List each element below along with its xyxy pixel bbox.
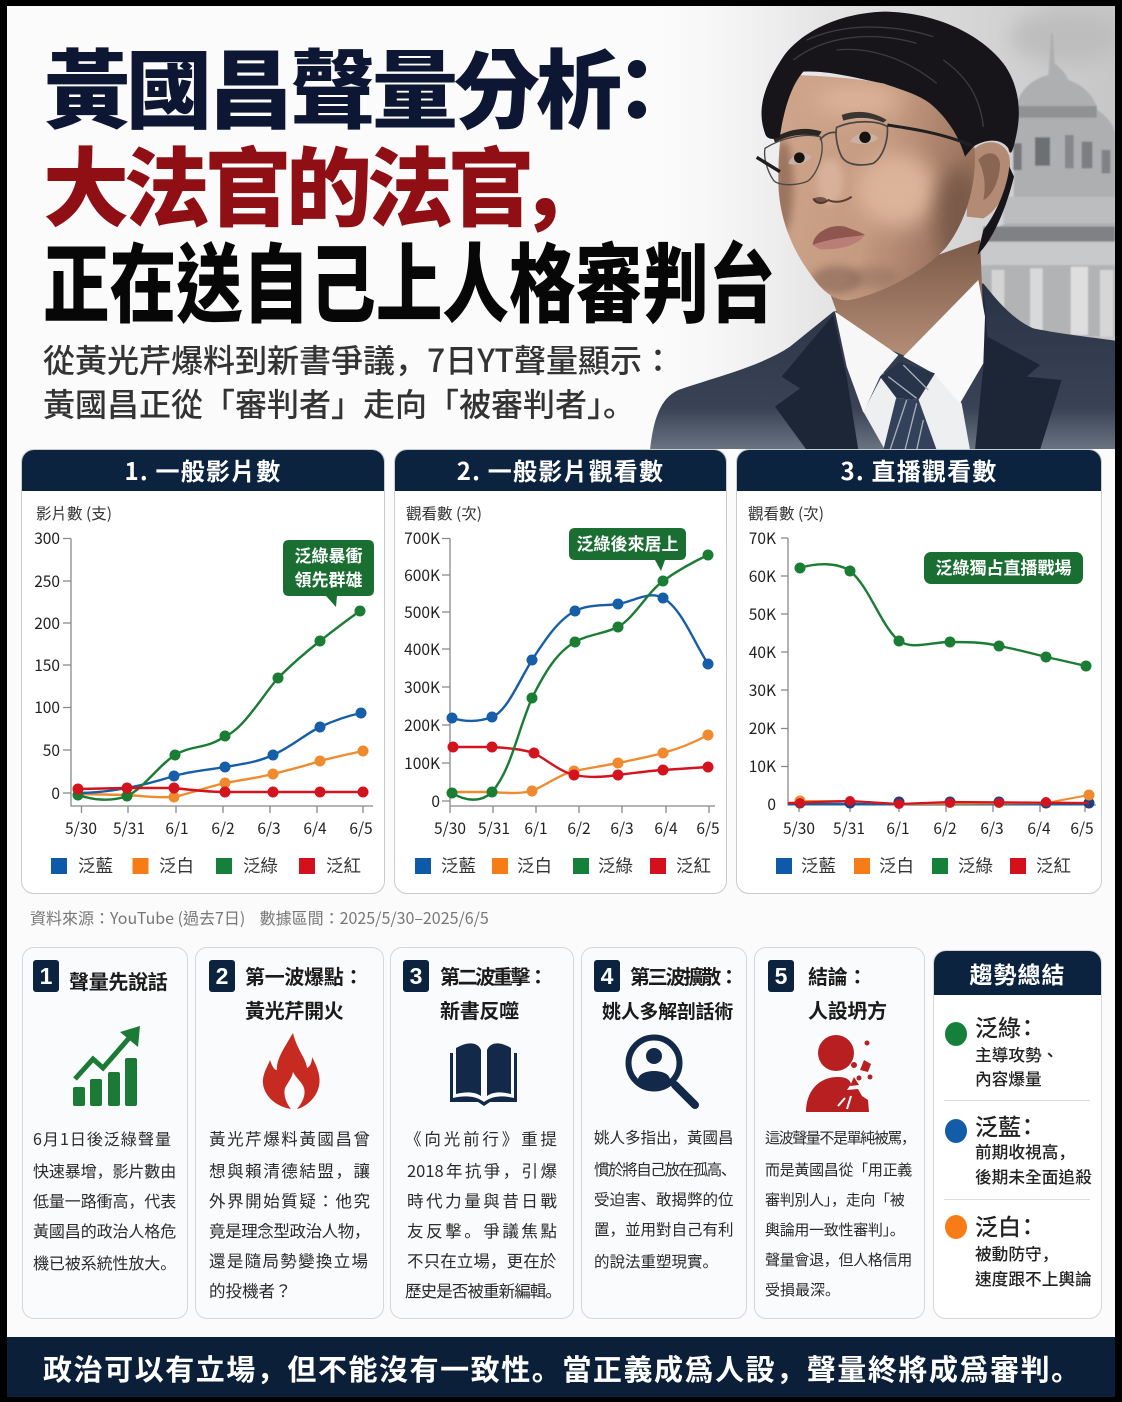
eyeglasses [757,122,972,185]
line chart: 觀看數: 600K [404,564,440,586]
legend [51,853,361,878]
card 2 body text: 外界開始質疑：他究 [209,1188,370,1212]
callout: 泛綠暴衝: 領先群雄 [294,566,362,591]
card 3 badge: 3 [410,963,422,989]
card 2 heading: 第一波爆點： [245,961,363,990]
card 4 body text: 姚人多指出，黃國昌 [594,1126,734,1148]
series: 泛藍 [78,708,366,793]
line chart: 直播觀看數: 6/5 [1070,817,1094,839]
line chart: 影片數: 5/31 [113,817,145,839]
line chart: 直播觀看數: 30K [749,679,776,701]
legend: 泛紅 [1036,853,1071,878]
legend: 泛綠 [598,853,633,878]
series: 泛白 [794,790,1094,806]
card 5: 結論 [754,947,925,1319]
card 5 body text: 聲量會退，但人格信用 [765,1249,912,1270]
subtitle [43,336,674,426]
card 5 heading: 人設坍方 [808,995,887,1024]
line chart: 影片數: 100 [34,696,60,718]
ear [967,142,1010,218]
line chart: 觀看數: 觀看數 (次) [406,502,482,524]
summary item: 泛白: 泛白： [975,1208,1039,1242]
line chart: 影片數: 6/4 [303,817,327,839]
card 5 heading: 結論： [808,961,867,990]
legend: 泛藍 [441,853,476,878]
line chart: 直播觀看數: 60K [749,565,776,587]
line chart: 影片數: 5/30 [65,817,97,839]
icon: flame [262,1033,320,1109]
icon: magnifier with person [626,1034,699,1109]
panel heading: 1. 一般影片數 [124,452,282,486]
card 2 body text: 黃光芹爆料黃國昌曾 [209,1126,370,1150]
summary item: 泛藍: 後期未全面追殺 [975,1164,1092,1188]
legend: 泛白 [879,853,914,878]
callout: 泛綠後來居上: 泛綠後來居上 [576,530,678,555]
panel heading: 3. 直播觀看數 [840,452,998,486]
line chart: 觀看數: 500K [404,601,440,623]
card 4 body text: 置，並用對自己有利 [594,1218,734,1240]
series: 泛藍 [788,796,1094,808]
icon: open book [450,1043,517,1106]
mouth [813,226,865,245]
title: line 3: 正在送自己上人格審判台 [43,215,775,340]
card 5 body text: 而是黃國昌從「用正義 [765,1159,912,1180]
summary item: 泛綠: 內容爆量 [975,1066,1042,1090]
summary heading [932,950,1102,994]
line chart: 觀看數: 6/5 [696,817,720,839]
card 4 heading [602,961,737,1024]
panel: 一般影片觀看數 [394,449,727,894]
line chart: 影片數 [34,502,374,878]
line chart: 直播觀看數: 6/3 [980,817,1004,839]
series: 泛紅 [448,742,714,780]
title: line 1: 黃國昌聲量分析： [44,21,676,146]
card 3 body text [405,1126,561,1302]
line chart: 直播觀看數: 50K [749,603,776,625]
series: 泛綠 [794,562,1092,672]
line chart: 直播觀看數: 觀看數 (次) [748,502,824,524]
line chart: 影片數: 150 [34,654,60,676]
summary item: 泛藍 [945,1108,1092,1188]
panel: 趨勢總結 [933,950,1102,1319]
panel heading [20,448,386,490]
summary item: 泛白: 被動防守， [975,1241,1058,1265]
building [977,33,1115,337]
summary item: 泛白: 速度跟不上輿論 [975,1266,1092,1290]
card 4 body text: 的說法重塑現實。 [594,1250,718,1272]
line chart: 影片數: 6/1 [165,817,189,839]
data source note: 資料來源：YouTube (過去7日) 數據區間：2025/5/30–2025/6/5 [30,905,489,929]
card 1 body text: 6月1日後泛綠聲量 [33,1126,171,1150]
legend: 泛白 [517,853,552,878]
legend: 泛綠 [958,853,993,878]
card 3: 第二波重擊 [390,947,574,1319]
card 2 body text [209,1126,370,1302]
card 1 body text: 快速暴增，影片數由 [33,1158,176,1182]
bottom banner [7,1337,1115,1397]
callout: 泛綠暴衝: 泛綠暴衝 [294,542,362,567]
panel: 一般影片數 [21,449,385,894]
shirt and collar [835,280,985,450]
card 2 badge: 2 [216,963,228,989]
series: 泛綠 [446,550,714,800]
line chart: 影片數: 6/5 [349,817,373,839]
summary item: 泛綠 [945,1009,1058,1090]
card 1 body text: 機已被系統性放大。 [33,1250,176,1274]
panel: 直播觀看數 [736,449,1102,894]
line chart: 直播觀看數: 40K [749,641,776,663]
line chart: 直播觀看數: 5/30 [783,817,815,839]
card 3 body text: 不只在立場，更在於 [407,1248,556,1272]
card 5 heading [808,961,887,1024]
subtitle: 從黃光芹爆料到新書爭議，7日YT聲量顯示： [43,336,674,382]
line chart: 觀看數: 6/4 [654,817,678,839]
series: 泛白 [452,730,714,796]
icon: crumbling person [806,1035,872,1112]
card 3 body text: 2018年抗爭，引爆 [407,1158,557,1182]
line chart: 直播觀看數: 6/4 [1027,817,1051,839]
summary item: 泛藍: 前期收視高， [975,1139,1075,1163]
callout: 泛綠獨占直播戰場 [924,552,1083,584]
legend: 泛藍 [801,853,836,878]
card 5 badge: 5 [775,963,787,989]
card 2 body text: 的投機者？ [209,1278,292,1302]
eyebrows [773,129,822,143]
card 2: 第一波爆點 [195,947,384,1319]
card 4 heading: 姚人多解剖話術 [602,997,733,1024]
card 3 body text: 《向光前行》重提 [405,1126,557,1150]
card 2 body text: 還是隨局勢變換立場 [209,1248,368,1272]
card 2 body text: 竟是理念型政治人物， [209,1218,370,1242]
hair [761,12,1019,255]
line chart: 影片數: 0 [51,782,60,804]
line chart: 觀看數: 6/2 [567,817,591,839]
series: 泛紅 [72,782,368,798]
legend: 泛紅 [676,853,711,878]
banner text: 政治可以有立場，但不能沒有一致性。當正義成爲人設，聲量終將成爲審判。 [43,1347,1082,1389]
line chart: 影片數: 影片數 (支) [36,502,112,524]
card 1 heading: 聲量先說話 [69,966,168,995]
series: 泛藍 [446,592,714,724]
card 1 body text: 黃國昌的政治人格危 [33,1218,176,1242]
card 3 heading: 第二波重擊： [440,961,546,990]
panel heading [736,448,1102,490]
line chart: 直播觀看數: 6/1 [886,817,910,839]
line chart: 直播觀看數: 5/31 [833,817,865,839]
summary item: 泛白 [945,1208,1092,1290]
line chart: 直播觀看數: 6/2 [933,817,957,839]
card 1 body text [33,1126,176,1274]
summary item: 泛綠: 主導攻勢、 [975,1042,1058,1066]
series: 泛綠 [72,606,366,802]
subtitle: 黃國昌正從「審判者」走向「被審判者」。 [43,380,635,426]
card 5 body text [765,1127,915,1300]
series: 泛白 [78,746,368,802]
line chart: 直播觀看數: 20K [749,717,776,739]
legend [776,853,1071,878]
summary item: 泛藍: 泛藍： [975,1108,1039,1142]
legend [415,853,711,878]
line chart: 觀看數: 6/1 [524,817,548,839]
line chart: 直播觀看數: 70K [749,527,776,549]
card 5 body text: 受損最深。 [765,1279,840,1300]
card 5 body text: 這波聲量不是單純被罵， [765,1127,915,1148]
card 4: 第三波擴散 [581,947,747,1319]
card 1 body text: 低量一路衝高，代表 [33,1188,176,1212]
title: line 2: 大法官的法官， [43,119,600,244]
card 4 body text: 受迫害、敢揭弊的位 [594,1188,734,1210]
panel heading: 2. 一般影片觀看數 [457,452,664,486]
card 4 heading: 第三波擴散： [630,961,737,990]
line chart: 影片數: 200 [34,612,60,634]
line chart: 影片數: 50 [43,739,60,761]
card 3 body text: 友反擊。爭議焦點 [407,1218,557,1242]
suit [650,283,1115,450]
card 3 badge [403,960,429,992]
line chart: 觀看數: 5/31 [478,817,510,839]
card 1 badge [33,960,59,992]
summary item: 泛綠: 泛綠： [975,1009,1039,1043]
legend: 泛紅 [326,853,361,878]
card 4 badge: 4 [601,963,613,989]
line chart: 影片數: 300 [34,527,60,549]
card 3 heading [440,961,546,1024]
callout: 泛綠暴衝 [283,540,374,607]
eyes [788,154,812,165]
line chart: 觀看數: 100K [404,752,440,774]
neck [830,240,983,357]
necktie [880,362,937,450]
line chart: 直播觀看數: 0 [767,793,776,815]
line chart: 影片數: 6/2 [211,817,235,839]
card 3 body text: 歷史是否被重新編輯。 [405,1278,561,1302]
legend: 泛白 [159,853,194,878]
summary heading: 趨勢總結 [970,956,1066,990]
series: 泛紅 [788,796,1089,809]
line chart: 觀看數: 700K [404,527,440,549]
line chart: 觀看數: 300K [404,676,440,698]
hero portrait illustration [650,6,1115,449]
card 2 heading [245,961,363,1024]
line chart: 影片數: 6/3 [257,817,281,839]
line chart: 觀看數 [404,502,720,878]
card 5 body text: 審判別人」，走向「被 [765,1189,905,1210]
card 5 body text: 輿論用一致性審判」。 [765,1219,905,1240]
callout: 泛綠獨占直播戰場: 泛綠獨占直播戰場 [936,554,1072,579]
line chart: 觀看數: 5/30 [434,817,466,839]
card 3 heading: 新書反噬 [440,995,519,1024]
card 4 badge [594,960,620,992]
card 4 body text: 慣於將自己放在孤高、 [594,1158,735,1180]
face [773,75,983,300]
legend: 泛藍 [78,853,113,878]
card 2 body text: 想與賴清德結盟，讓 [209,1158,370,1182]
line chart: 觀看數: 6/3 [610,817,634,839]
card 4 body text [594,1126,735,1272]
line chart: 直播觀看數 [748,502,1096,878]
line chart: 觀看數: 200K [404,714,440,736]
icon: rising chart [73,1026,140,1106]
card 1 badge: 1 [40,963,52,989]
line chart: 觀看數: 0 [431,790,440,812]
card 3 body text: 時代力量與昔日戰 [407,1188,557,1212]
legend: 泛綠 [243,853,278,878]
line chart: 直播觀看數: 10K [749,755,776,777]
nostrils and nose line [813,197,852,203]
card 5 badge [768,960,794,992]
card 1: 聲量先說話 [22,947,188,1319]
line chart: 觀看數: 400K [404,638,440,660]
card 2 heading: 黃光芹開火 [245,995,344,1024]
card 2 badge [209,960,235,992]
line chart: 影片數: 250 [34,570,60,592]
panel heading [394,448,728,490]
callout: 泛綠後來居上 [569,528,686,571]
